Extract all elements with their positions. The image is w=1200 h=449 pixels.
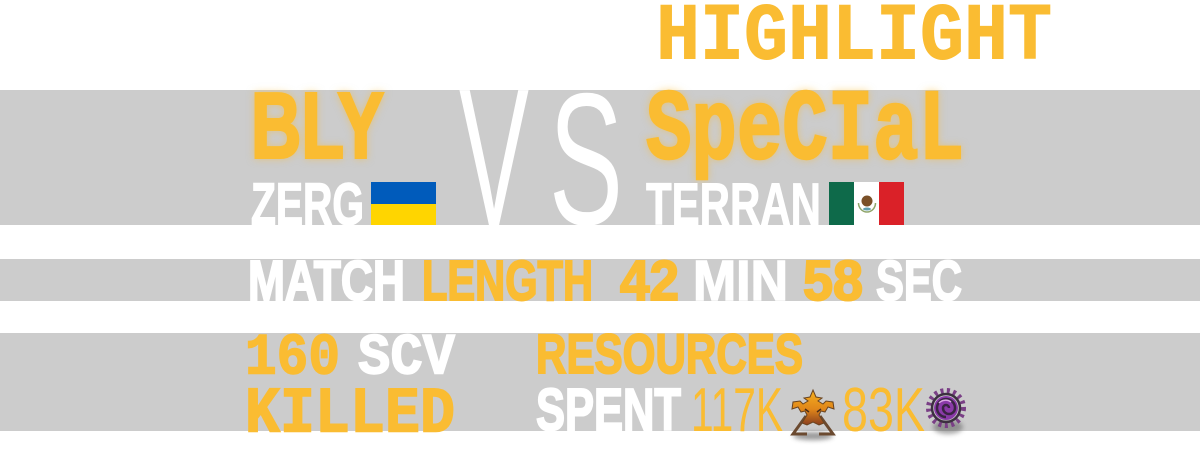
- band: stats: [0, 333, 1200, 431]
- SCV count: 160: [245, 326, 340, 392]
- icon: Ukraine flag: [371, 182, 436, 225]
- label: match: MATCH: [248, 249, 405, 313]
- seconds unit: SEC: [876, 249, 962, 313]
- seconds value: 58: [803, 249, 863, 313]
- player two name: SpeCIaL: [646, 76, 964, 189]
- player two race: TERRAN: [646, 172, 821, 238]
- minutes value: 42: [620, 249, 679, 313]
- player one race: ZERG: [251, 172, 364, 238]
- band: match length: [0, 259, 1200, 301]
- band: players: [0, 90, 1200, 225]
- icon: Mexico flag: [829, 182, 904, 225]
- label: length: LENGTH: [422, 249, 593, 313]
- match length: [248, 249, 962, 313]
- versus letter V: V: [459, 48, 529, 267]
- stat: resources spent: [536, 322, 964, 445]
- player one name: BLY: [251, 74, 384, 178]
- icon: Terran emblem: [792, 390, 834, 440]
- stat: SCV killed: [245, 326, 455, 449]
- icon: Zerg emblem: [928, 390, 964, 434]
- versus letter S: S: [549, 54, 623, 264]
- resources label: RESOURCES: [536, 322, 803, 385]
- SCV label: SCV: [358, 326, 455, 392]
- Zerg resources value: 83K: [842, 376, 925, 445]
- player two: [646, 76, 964, 238]
- Terran resources value: 117K: [691, 376, 783, 445]
- versus: [459, 48, 623, 267]
- player one: [251, 74, 436, 238]
- minutes unit: MIN: [693, 249, 788, 313]
- spent label: SPENT: [536, 377, 681, 443]
